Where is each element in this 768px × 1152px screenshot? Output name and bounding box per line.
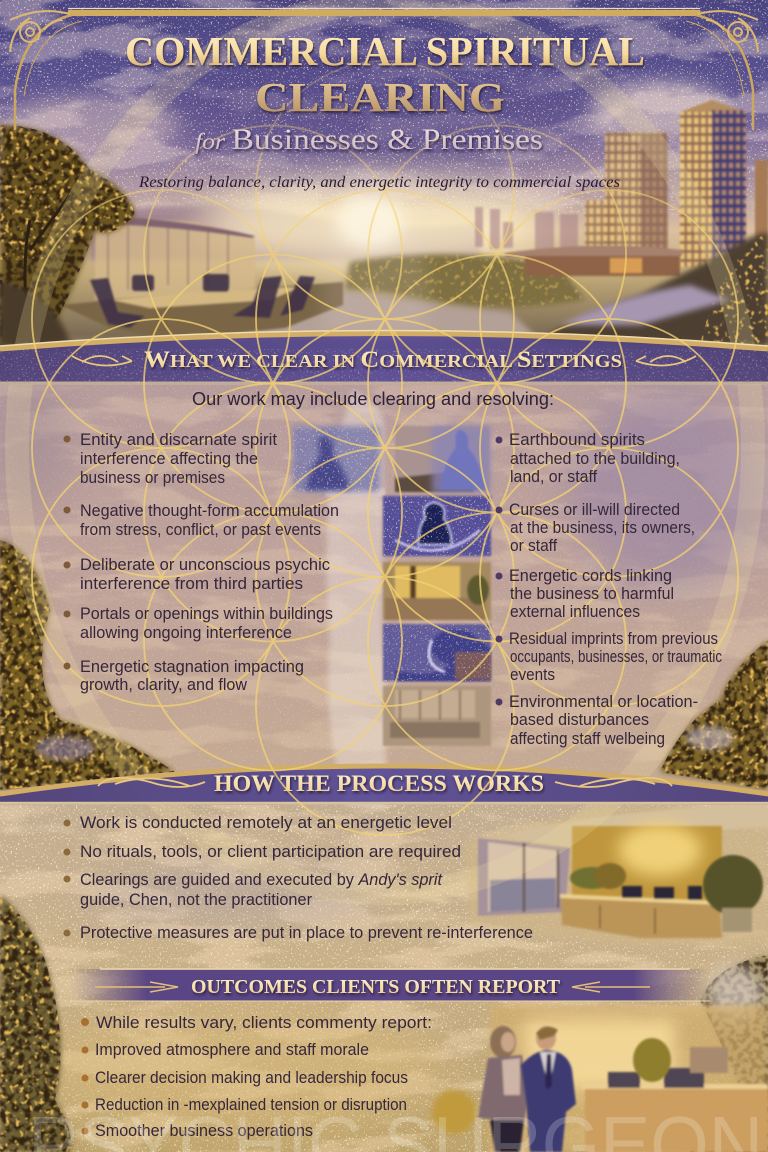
title line 2: CLEARING [255,74,505,120]
office lobby illustration with people [432,1005,768,1152]
outcomes list: Clearer decision making and leadership focus [95,1068,408,1087]
right clearing list: at the business, its owners, [510,518,695,537]
left clearing list: interference affecting the [80,449,258,468]
process list: Protective measures are put in place to prevent re-interference [80,923,533,942]
central translucent figure [320,165,430,810]
right clearing list: based disturbances [510,710,649,729]
panel texture: process [0,805,768,1152]
image: faded lobby [383,686,491,746]
flower of life geometry [32,61,738,835]
background: sky clouds and stars [0,0,768,215]
flourish left [95,982,178,992]
tall tower [680,100,746,267]
mid tower [585,132,668,252]
subtitle: for Businesses & Premises [195,123,543,156]
left clearing list: Entity and discarnate spirit [80,430,277,449]
title block [125,28,645,156]
foliage: lower panel edges [0,895,768,1152]
right clearing list: events [510,665,555,684]
water path [150,292,540,340]
plants [570,855,763,932]
right clearing list: land, or staff [510,467,597,486]
distant skyline [475,207,578,252]
left clearing list: allowing ongoing interference [80,623,292,642]
flourish right [555,778,672,787]
left clearing list: growth, clarity, and flow [80,675,248,694]
outcomes list: Improved atmosphere and staff morale [95,1040,369,1059]
right clearing list: or staff [510,536,557,555]
man [521,1026,576,1152]
foliage: lower corners of first panel [0,540,768,790]
left clearing list: Portals or openings within buildings [80,604,333,623]
left clearing list: Deliberate or unconscious psychic [80,555,330,574]
right clearing list: Curses or ill-will directed [509,500,680,519]
section band: how the process works [0,766,768,803]
outcomes list: Smoother business operations [95,1121,313,1140]
spirit images column [293,426,491,746]
conference table and chairs [60,274,343,340]
image: entity with swirl [383,496,491,556]
heading: how the process works: HOW THE PROCESS WORKS [214,771,544,796]
outcomes list [81,1013,432,1140]
potted plant [633,1038,671,1082]
flourish right [636,356,696,365]
meadow [345,254,585,308]
flourish left [72,356,132,365]
back wall [572,826,722,902]
left clearing list: business or premises [80,468,225,487]
heading: outcomes: OUTCOMES CLIENTS OFTEN REPORT [191,976,561,998]
window [478,838,570,916]
woman [478,1026,528,1152]
left clearing list [64,430,339,694]
left clearing list: from stress, conflict, or past events [80,520,321,539]
ceiling [500,806,768,848]
yellow shrub [432,1090,476,1134]
right clearing list: Earthbound spirits [509,430,645,449]
process list: Work is conducted remotely at an energetic level [80,813,452,832]
far right building [755,160,768,250]
image: vortex [383,624,491,681]
right clearing list: attached to the building, [510,449,680,468]
right clearing list: Residual imprints from previous [509,629,718,648]
outcomes list: Reduction in -mexplained tension or disruption [95,1095,407,1114]
outer sacred ring [17,3,753,893]
horizon hills [90,205,480,260]
right clearing list [496,430,722,748]
right clearing list: Environmental or location- [509,692,698,711]
reception desk [582,1047,768,1152]
flourish left [98,778,205,787]
process list [64,813,533,942]
reception illustration [465,806,768,945]
image: entity left [293,426,380,492]
desk [560,886,722,938]
right flowering bushes [540,232,768,345]
heading: what we clear: WHAT WE CLEAR IN COMMERCIAL SETTINGS [144,347,622,372]
outcomes list: While results vary, clients commenty report: [96,1013,432,1032]
left clearing list: interference from third parties [80,574,303,593]
ornate gold frame [10,8,758,130]
process list: No rituals, tools, or client participation are required [80,842,461,861]
low pavilion [505,246,682,276]
right clearing list: affecting staff welbeing [510,729,665,748]
corner swirl right [698,11,758,52]
image: warm interior [383,562,491,620]
title line 1: COMMERCIAL SPIRITUAL [125,28,645,74]
section band: what we clear [0,330,768,384]
left clearing list: Negative thought-form accumulation [80,501,339,520]
process list: Clearings are guided and executed by Andy's sprit [80,870,443,889]
process list: guide, Chen, not the practitioner [80,890,312,909]
left tree [0,125,135,345]
intro line: Our work may include clearing and resolving: [192,389,554,409]
corner swirl left [10,11,70,52]
right clearing list: external influences [510,602,640,621]
illustration: hero landscape [0,100,768,345]
section band: outcomes [70,969,710,1001]
right clearing list: the business to harmful [510,584,674,603]
tagline: Restoring balance, clarity, and energetic integrity to commercial spaces [138,174,620,191]
panel texture: what we clear [0,370,768,770]
right clearing list: Energetic cords linking [509,566,672,585]
left clearing list: Energetic stagnation impacting [80,657,304,676]
central sun glow [195,180,555,270]
glass office [95,215,255,300]
left lower foliage [0,280,70,345]
image: office with spirit [395,426,490,492]
flourish right [572,982,650,992]
